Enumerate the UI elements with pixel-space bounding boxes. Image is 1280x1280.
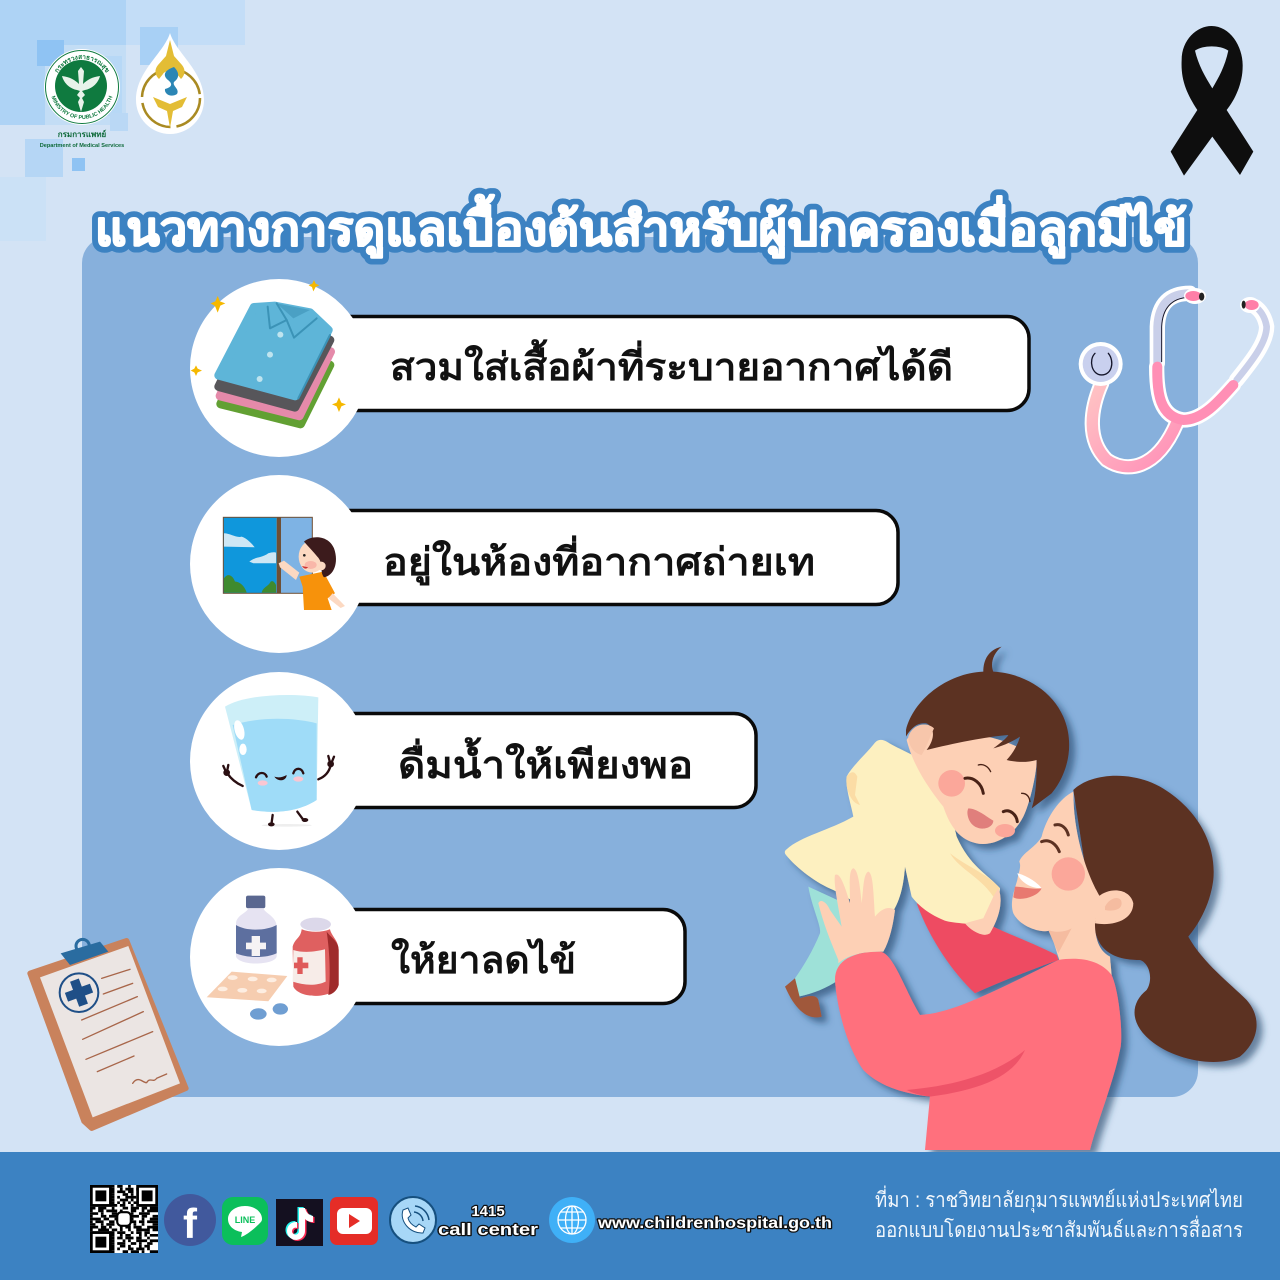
call center text: call center [438, 1220, 538, 1239]
circle: clothing [190, 279, 368, 457]
row 3: drink water [190, 672, 756, 850]
icon: black mourning ribbon [1171, 26, 1253, 176]
mother body [835, 952, 1121, 1150]
logo: Ministry of Public Health: กระทรวงสาธารณสุข [55, 54, 110, 73]
icon: folded shirts [191, 280, 346, 424]
title: แนวทางการดูแลเบื้องต้นสำหรับผู้ปกครองเมื่อลูกมีไข้ [95, 194, 1187, 259]
source credits [875, 1185, 1243, 1242]
mother far arm [917, 903, 1058, 993]
text pill: fever medicine: ให้ยาลดไข้ [391, 938, 576, 982]
row 4: fever medicine [190, 868, 685, 1046]
logo: Ministry of Public Health: MINISTRY OF PUBLIC HEALTH [52, 96, 112, 120]
icon: medicine bottles and pills [207, 896, 339, 1020]
icon: globe [549, 1197, 595, 1243]
call center text [438, 1203, 538, 1239]
icon: Facebook [164, 1194, 216, 1247]
QR code [90, 1185, 158, 1253]
text pill: ventilated room [300, 510, 898, 604]
icon: clipboard [30, 939, 186, 1128]
child cheeks [938, 770, 965, 797]
icon: phone call centre [390, 1197, 436, 1243]
mother hand [818, 868, 895, 963]
panel: main blue background [82, 237, 1198, 1097]
child hand [965, 888, 1001, 935]
website text: www.childrenhospital.go.th [597, 1215, 832, 1232]
child hoodie [785, 740, 1000, 927]
mother arm shade [907, 1050, 1025, 1097]
icon: Facebook: f [183, 1200, 198, 1247]
logo: gold droplet emblem [136, 33, 204, 134]
child face lines [965, 765, 1030, 822]
text pill: ventilated room: อยู่ในห้องที่อากาศถ่ายเท [383, 535, 815, 586]
text pill: clothing [300, 316, 1029, 410]
icon: LINE [222, 1197, 268, 1245]
text pill: drink water: ดื่มน้ำให้เพียงพอ [398, 737, 693, 787]
logo: Ministry of Public Health: Department of Medical Services [40, 143, 124, 149]
text pill: fever medicine [300, 910, 685, 1004]
source credits: ที่มา : ราชวิทยาลัยกุมารแพทย์แห่งประเทศไทย [875, 1185, 1243, 1213]
circle: drink water [190, 672, 368, 850]
logo: Ministry of Public Health [40, 49, 124, 149]
child ear [908, 725, 934, 755]
circle: fever medicine [190, 868, 368, 1046]
text pill: clothing: สวมใส่เสื้อผ้าที่ระบายอากาศได้ดี [390, 339, 953, 389]
source credits: ออกแบบโดยงานประชาสัมพันธ์และการสื่อสาร [875, 1215, 1243, 1242]
logo: Ministry of Public Health: กรมการแพทย์ [58, 129, 107, 139]
icon: YouTube [330, 1197, 378, 1245]
mother neck shadow [1048, 928, 1072, 953]
footer bar [0, 1152, 1280, 1280]
circle: ventilated room [190, 475, 368, 653]
mother mouth [1013, 887, 1042, 899]
icon: TikTok [276, 1199, 323, 1246]
child mouth [967, 808, 993, 829]
mother face and neck [1012, 792, 1112, 975]
child legs [795, 887, 880, 997]
child head [907, 730, 1037, 844]
icon: smiling water glass [223, 695, 334, 827]
icon: child opening window [223, 517, 345, 610]
title: แนวทางการดูแลเบื้องต้นสำหรับผู้ปกครองเมื่อลูกมีไข้ [95, 194, 1187, 259]
row 1: clothing [190, 279, 1029, 457]
child hair [906, 647, 1069, 808]
text pill: drink water [300, 714, 756, 808]
illustration: mother lifting child [785, 647, 1257, 1150]
call center text: 1415 [471, 1203, 505, 1220]
mother eyes [1042, 825, 1068, 852]
mother ear [1095, 890, 1133, 924]
mother hair [1073, 776, 1257, 1062]
row 2: ventilated room [190, 475, 898, 653]
icon: LINE: LINE [235, 1215, 255, 1225]
decorative squares top left [0, 0, 245, 241]
mother cheek [1052, 857, 1085, 891]
icon: stethoscope [1079, 288, 1267, 467]
